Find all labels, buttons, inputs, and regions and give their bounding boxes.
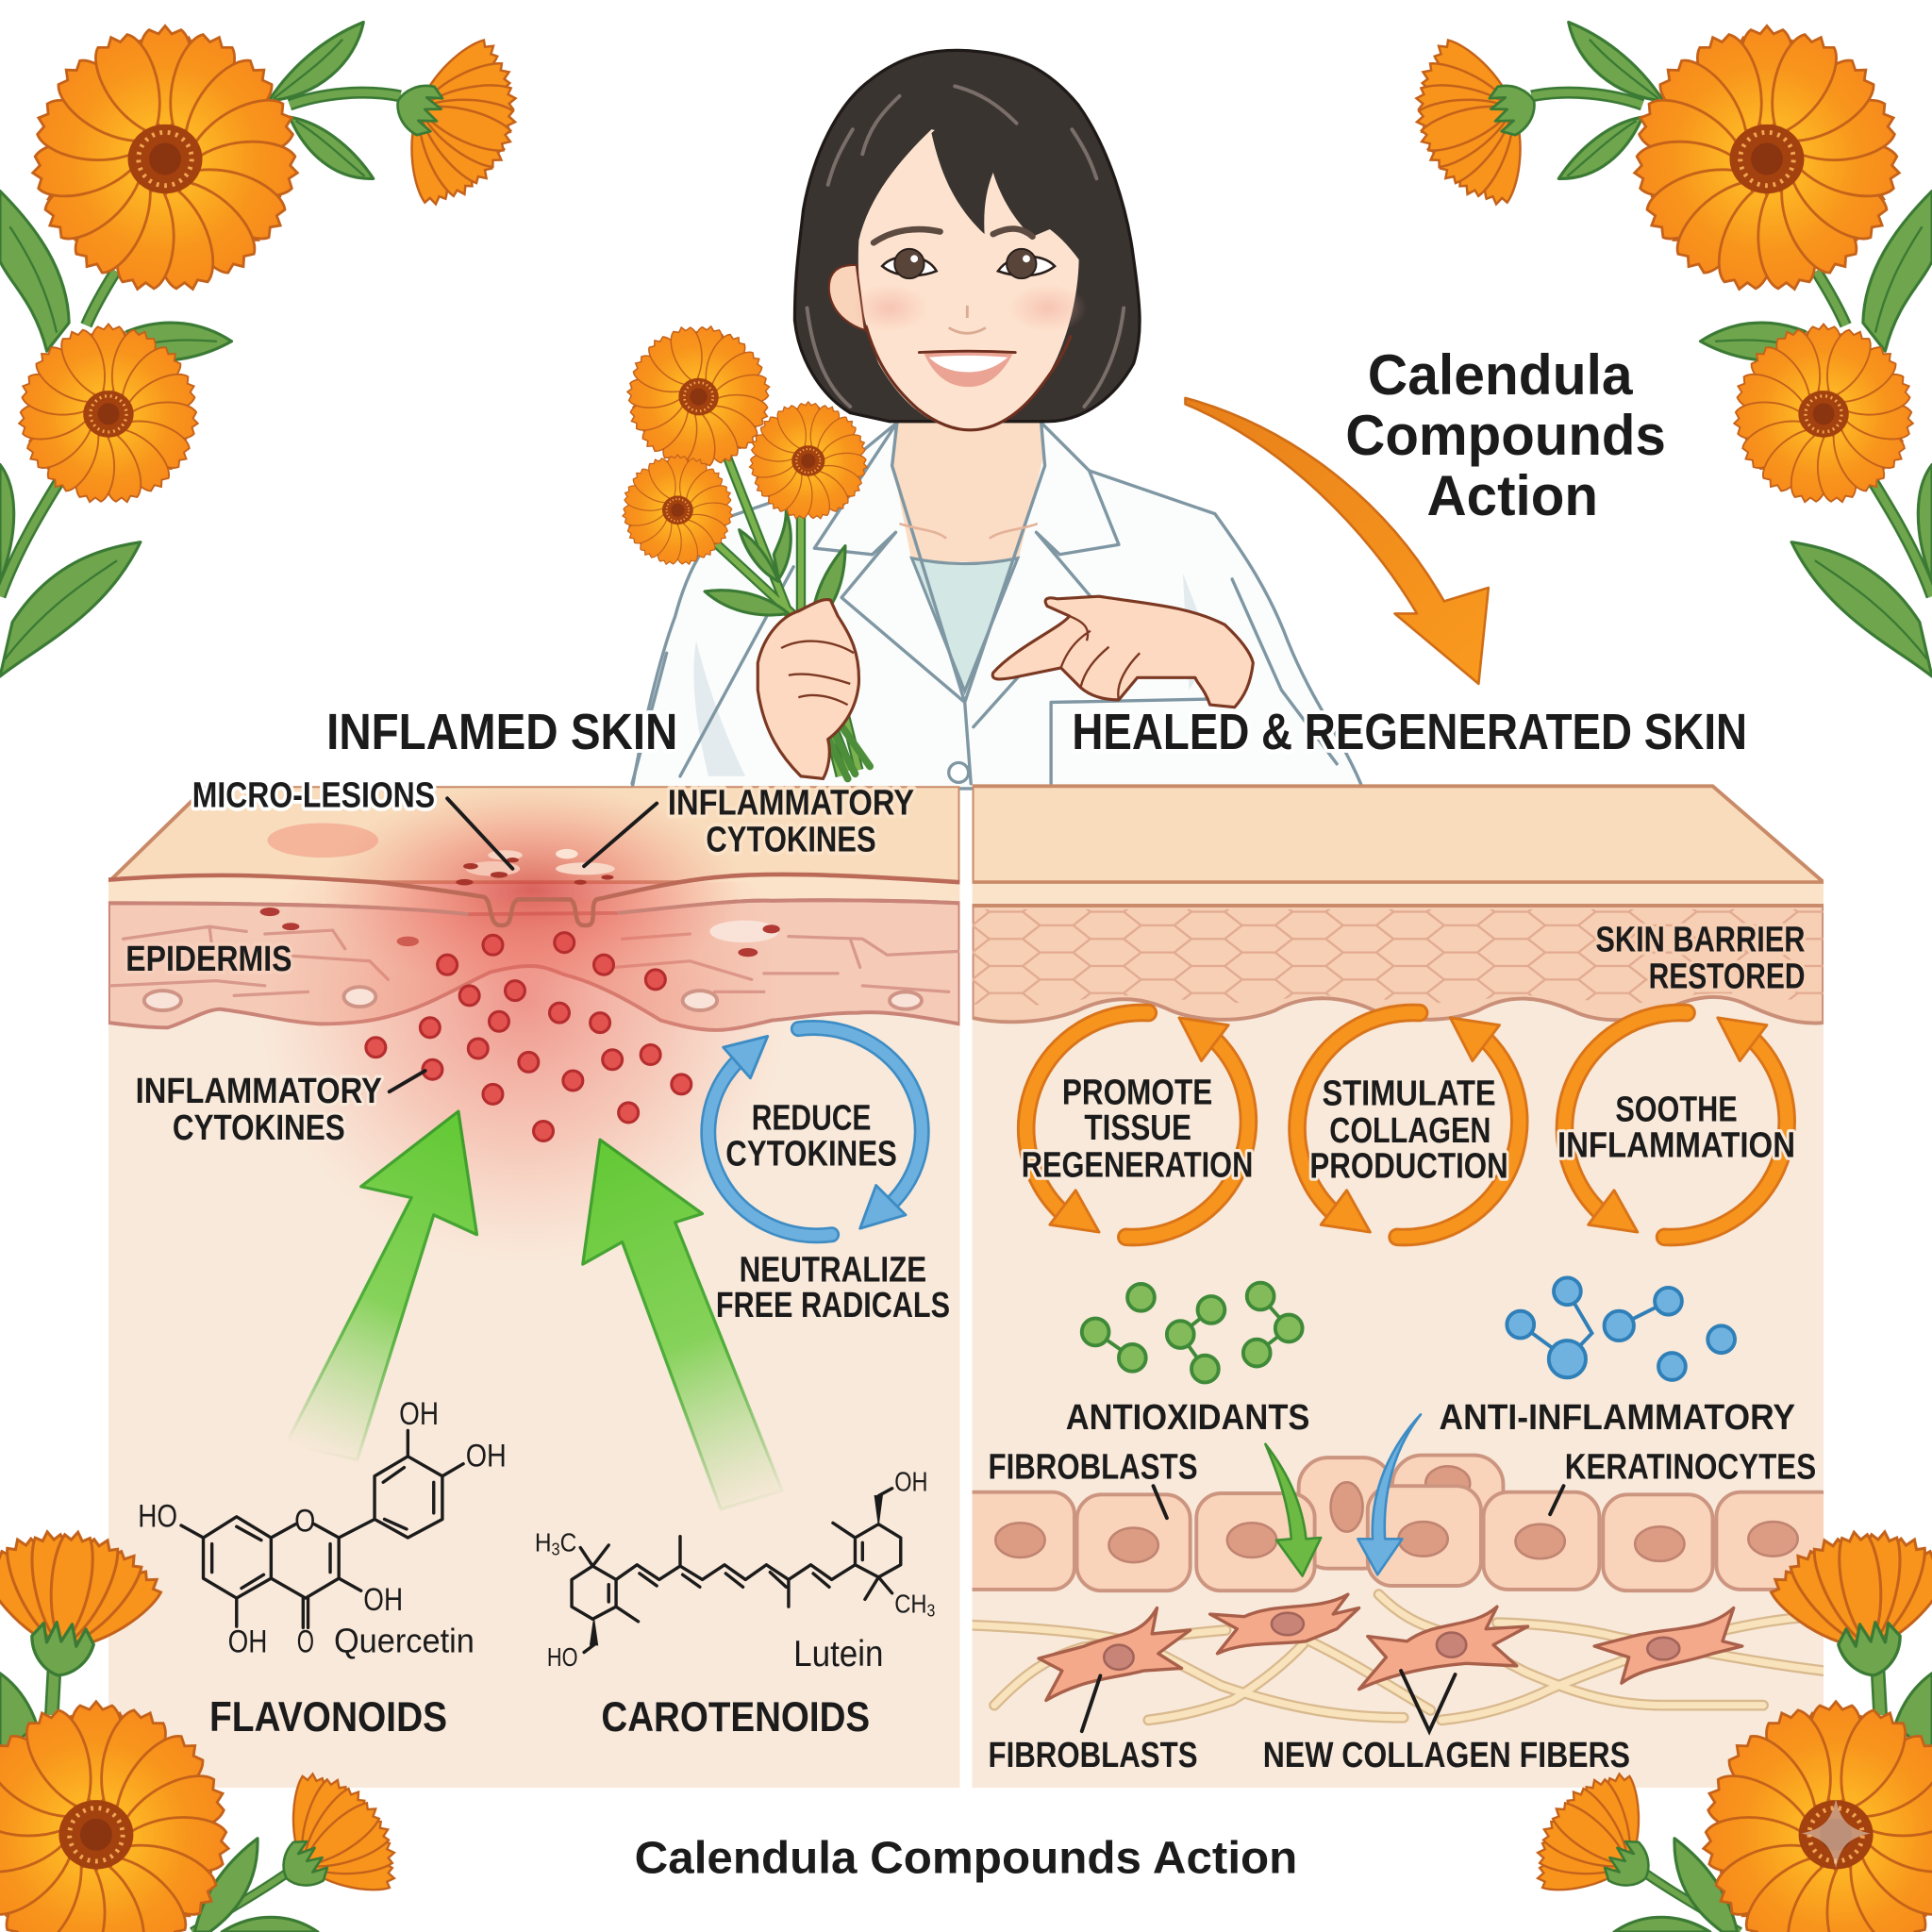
- blush: [850, 283, 929, 333]
- flowers: top-left corner: [0, 14, 543, 676]
- redness on surface: [267, 823, 378, 858]
- heading: inflamed skin: INFLAMED SKIN: [326, 705, 677, 760]
- molecule: lutein: CH: [894, 1590, 932, 1619]
- blue cycle arrows: [708, 1028, 922, 1236]
- fingers: [781, 641, 854, 705]
- label: soothe inflammation: SOOTHE: [1615, 1091, 1738, 1130]
- label: new collagen fibers: NEW COLLAGEN FIBERS: [1263, 1736, 1630, 1775]
- molecule: quercetin: O: [294, 1504, 315, 1540]
- label: keratinocytes: [1550, 1447, 1816, 1514]
- label: reduce cytokines: CYTOKINES: [725, 1135, 897, 1174]
- lab coat: [632, 423, 1363, 789]
- cytokine dots: [366, 933, 691, 1141]
- molecule: quercetin: OH: [363, 1582, 403, 1618]
- label: micro-lesions: MICRO-LESIONS: [192, 776, 435, 816]
- skin cell pattern: [973, 909, 1824, 1006]
- fibroblast 2: [1210, 1594, 1359, 1654]
- label: inflammatory cytokines left: CYTOKINES: [173, 1108, 345, 1148]
- panel: healed skin: [949, 786, 1846, 1788]
- label: stimulate collagen production: PRODUCTION: [1309, 1147, 1508, 1187]
- epidermis layer: [108, 900, 959, 1030]
- back hair: [794, 50, 1140, 422]
- title: Calendula Compounds Action: Calendula: [1368, 343, 1633, 407]
- heading: healed skin: HEALED & REGENERATED SKIN: [1072, 705, 1747, 760]
- bouquet flowers: [614, 314, 868, 567]
- label: neutralize free radicals: FREE RADICALS: [716, 1286, 950, 1325]
- dermis background: [972, 998, 1824, 1788]
- stratum surface: [108, 786, 959, 882]
- label: promote tissue regeneration: REGENERATION: [1022, 1145, 1253, 1185]
- hair highlights: [808, 86, 1124, 407]
- orange cycle 2: [1297, 1012, 1520, 1238]
- pointing hand: [992, 596, 1253, 708]
- fibroblast 4: [1594, 1607, 1742, 1683]
- label: neutralize free radicals: NEUTRALIZE: [740, 1250, 926, 1290]
- label: promote tissue regeneration: [1022, 1073, 1253, 1185]
- orange cycle 3: [1564, 1012, 1787, 1238]
- label: reduce cytokines: REDUCE: [752, 1099, 871, 1139]
- label: micro-lesions: [192, 776, 512, 869]
- label: stimulate collagen production: [1309, 1074, 1508, 1187]
- dermis background: [108, 882, 959, 1788]
- label: soothe inflammation: INFLAMMATION: [1557, 1125, 1795, 1165]
- label: fibroblasts bottom: [989, 1675, 1198, 1775]
- label: inflammatory cytokines top: CYTOKINES: [706, 821, 876, 860]
- stratum surface: [973, 786, 1824, 882]
- title: Calendula Compounds Action: Compounds: [1345, 404, 1666, 467]
- title: Calendula Compounds Action: [1345, 343, 1666, 527]
- molecule: lutein: [535, 1467, 935, 1674]
- molecule: lutein: HO: [547, 1642, 578, 1672]
- label: stimulate collagen production: STIMULATE: [1322, 1074, 1496, 1114]
- woman in lab coat: [614, 50, 1363, 789]
- flowers: bottom-right corner: [1508, 1518, 1932, 1932]
- label: flavonoids: FLAVONOIDS: [209, 1694, 447, 1740]
- molecule: quercetin: OH: [399, 1396, 439, 1432]
- label: epidermis: EPIDERMIS: [125, 940, 292, 979]
- eyebrows: [874, 228, 1033, 242]
- label: stimulate collagen production: COLLAGEN: [1329, 1111, 1491, 1151]
- label: promote tissue regeneration: TISSUE: [1084, 1108, 1191, 1148]
- red spots in epidermis: [260, 908, 780, 957]
- blue arrow: anti-inflammatory: [1357, 1414, 1421, 1574]
- label: fibroblasts top: [989, 1447, 1198, 1518]
- blue anti-inflammatory molecules: [1507, 1277, 1735, 1380]
- molecule: lutein: H: [535, 1527, 554, 1557]
- micro lesions: [456, 849, 615, 885]
- molecule: lutein: 3: [552, 1539, 560, 1558]
- panel: inflamed skin: [108, 785, 959, 1788]
- label: carotenoids: CAROTENOIDS: [601, 1694, 870, 1740]
- label: anti-inflammatory: ANTI-INFLAMMATORY: [1440, 1398, 1795, 1438]
- flowers: bottom-left corner: [0, 1518, 424, 1932]
- lesion glow: [346, 796, 721, 972]
- keratinocyte cells: [949, 1486, 1846, 1591]
- bouquet stems and leaves: [705, 431, 858, 776]
- flowers: top-right corner: [1389, 14, 1932, 676]
- label: reduce cytokines: [725, 1099, 897, 1174]
- molecule: lutein: C: [560, 1527, 576, 1557]
- sparkle watermark: [1802, 1799, 1871, 1868]
- green arrow: carotenoids: [583, 1140, 782, 1509]
- label: skin barrier restored: RESTORED: [1649, 958, 1805, 997]
- epidermis layer: [973, 906, 1824, 1024]
- caption: Calendula Compounds Action: Calendula Compounds Action: [635, 1832, 1297, 1883]
- label: inflammatory cytokines left: INFLAMMATORY: [136, 1072, 382, 1111]
- label: soothe inflammation: [1557, 1091, 1795, 1165]
- orange cycle 1: [1026, 1012, 1248, 1238]
- label: new collagen fibers: [1263, 1671, 1630, 1775]
- left hand: [758, 599, 858, 778]
- green arrow: antioxidants: [1265, 1444, 1321, 1576]
- collar and lapels: [632, 423, 1337, 784]
- collagen fibers: [973, 1594, 1824, 1720]
- eyes: [882, 249, 1055, 278]
- label: inflammatory cytokines left: [136, 1071, 425, 1148]
- label: fibroblasts bottom: FIBROBLASTS: [989, 1736, 1198, 1775]
- epidermis ovals: [144, 921, 922, 1010]
- sleeve shading: [693, 573, 1214, 776]
- molecule: quercetin: OH: [228, 1624, 267, 1660]
- label: fibroblasts top: FIBROBLASTS: [989, 1447, 1198, 1487]
- mouth: [919, 351, 1015, 387]
- fibroblast 3: [1359, 1607, 1528, 1690]
- molecule: lutein: Lutein: [793, 1634, 883, 1674]
- finger creases: [1061, 616, 1140, 700]
- molecule: lutein: 3: [927, 1601, 935, 1621]
- molecule: quercetin: O: [297, 1624, 314, 1660]
- molecule: quercetin: [138, 1396, 507, 1660]
- label: skin barrier restored: [1595, 920, 1805, 997]
- upper layer: [108, 877, 960, 908]
- label: keratinocytes: KERATINOCYTES: [1565, 1447, 1816, 1487]
- cell cracks: [111, 926, 959, 995]
- stems below hand: [820, 721, 870, 778]
- surface lines: [108, 874, 959, 925]
- molecule: quercetin: OH: [466, 1438, 507, 1474]
- label: inflammatory cytokines top: INFLAMMATORY: [668, 783, 914, 823]
- glow: [296, 883, 751, 1228]
- title: Calendula Compounds Action: Action: [1426, 464, 1598, 527]
- neck and chest: [892, 394, 1043, 562]
- bangs: [931, 110, 1083, 264]
- molecule: lutein: OH: [894, 1467, 928, 1497]
- fibroblast 1: [1039, 1607, 1191, 1700]
- label: neutralize free radicals: [716, 1250, 950, 1325]
- collarbone: [899, 524, 1038, 539]
- keratinocyte back cells: [1299, 1456, 1503, 1569]
- label: skin barrier restored: SKIN BARRIER: [1595, 920, 1805, 959]
- face: [858, 129, 1079, 430]
- green antioxidant molecules: [1082, 1283, 1303, 1382]
- molecule: quercetin: HO: [138, 1498, 177, 1534]
- nose: [949, 306, 986, 333]
- blush right: [1008, 283, 1087, 333]
- label: inflammatory cytokines top: [584, 783, 914, 866]
- molecule: quercetin: Quercetin: [334, 1622, 475, 1660]
- upper band: [972, 883, 1824, 904]
- surface lines: [973, 882, 1824, 906]
- green arrow: flavonoids: [286, 1111, 476, 1460]
- label: promote tissue regeneration: PROMOTE: [1062, 1073, 1212, 1112]
- jaw line: [866, 326, 1071, 430]
- shirt: [912, 558, 1018, 691]
- label: antioxidants: ANTIOXIDANTS: [1066, 1398, 1309, 1438]
- orange arrow: [1185, 398, 1489, 684]
- coat button: [949, 762, 969, 782]
- ear: [829, 265, 865, 330]
